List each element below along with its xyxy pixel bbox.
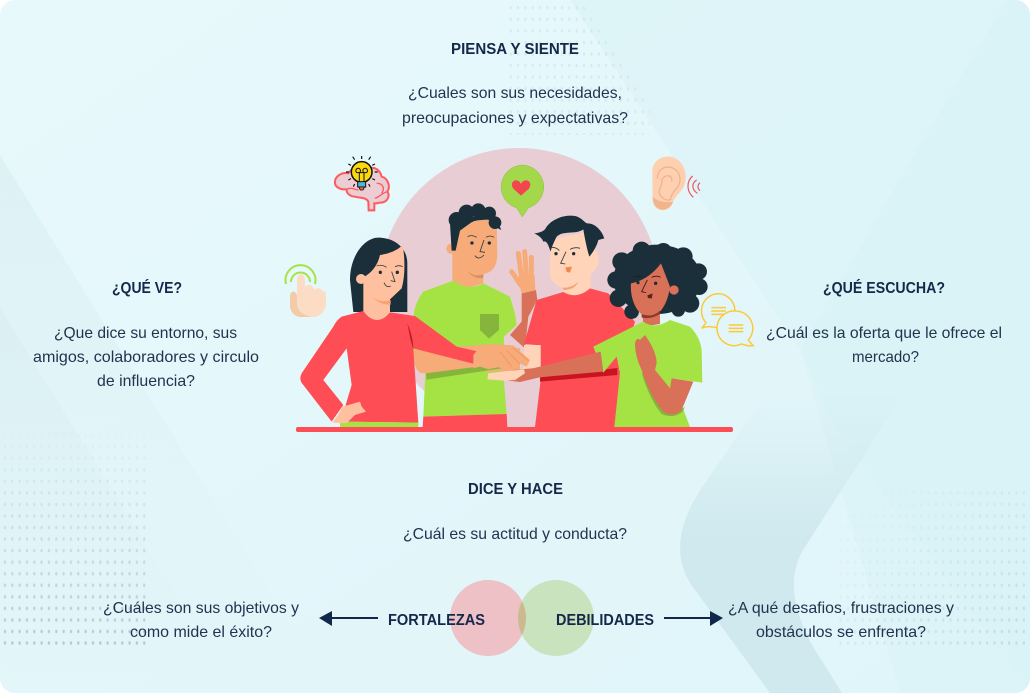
text: qué ve question <box>33 325 259 390</box>
text: piensa y siente question: preocupaciones y expectativas? <box>402 110 628 127</box>
person: woman with curly hair in green shirt <box>593 242 708 427</box>
icon: ear with sound waves <box>652 157 700 210</box>
icon: brain with light bulb <box>335 156 389 210</box>
icon: touch hand <box>286 265 326 317</box>
text: dice y hace question: ¿Cuál es su actitud y conducta? <box>403 526 627 543</box>
icon: chat bubbles <box>701 294 753 346</box>
label: fortalezas: FORTALEZAS <box>388 612 485 629</box>
text: debilidades question <box>728 600 954 641</box>
text: qué ve question: de influencia? <box>97 373 195 390</box>
text: qué ve question: amigos, colaboradores y circulo <box>33 349 259 366</box>
text: debilidades question: ¿A qué desafios, frustraciones y <box>728 600 954 617</box>
person: woman with long hair in red sweater <box>300 238 493 427</box>
stacked hands <box>473 344 603 382</box>
person: man in green shirt <box>413 203 520 427</box>
text: fortalezas question <box>103 600 299 641</box>
ground bar <box>296 427 733 432</box>
text: debilidades question: obstáculos se enfrenta? <box>756 624 926 641</box>
text: qué ve question: ¿Que dice su entorno, sus <box>54 325 237 342</box>
text: qué escucha question <box>766 325 1002 366</box>
pink background circle <box>379 148 659 428</box>
icon: speech bubble with heart <box>501 165 544 217</box>
illustration: team of four people <box>300 203 708 427</box>
label: debilidades: DEBILIDADES <box>556 612 654 629</box>
text: fortalezas question: como mide el éxito? <box>130 624 272 641</box>
heading: dice y hace: DICE Y HACE <box>468 481 563 498</box>
venn circles <box>450 580 594 656</box>
text: fortalezas question: ¿Cuáles son sus objetivos y <box>103 600 299 617</box>
arrow: left <box>319 611 378 626</box>
person: man in red shirt <box>510 216 635 427</box>
text: qué escucha question: mercado? <box>852 349 919 366</box>
text: piensa y siente question <box>402 85 628 127</box>
text: qué escucha question: ¿Cuál es la oferta que le ofrece el <box>766 325 1002 342</box>
heading: piensa y siente: PIENSA Y SIENTE <box>451 41 579 58</box>
arrow: right <box>664 611 723 626</box>
text: piensa y siente question: ¿Cuales son sus necesidades, <box>408 85 622 102</box>
heading: qué ve: ¿QUÉ VE? <box>112 278 182 297</box>
heading: qué escucha: ¿QUÉ ESCUCHA? <box>823 278 945 297</box>
